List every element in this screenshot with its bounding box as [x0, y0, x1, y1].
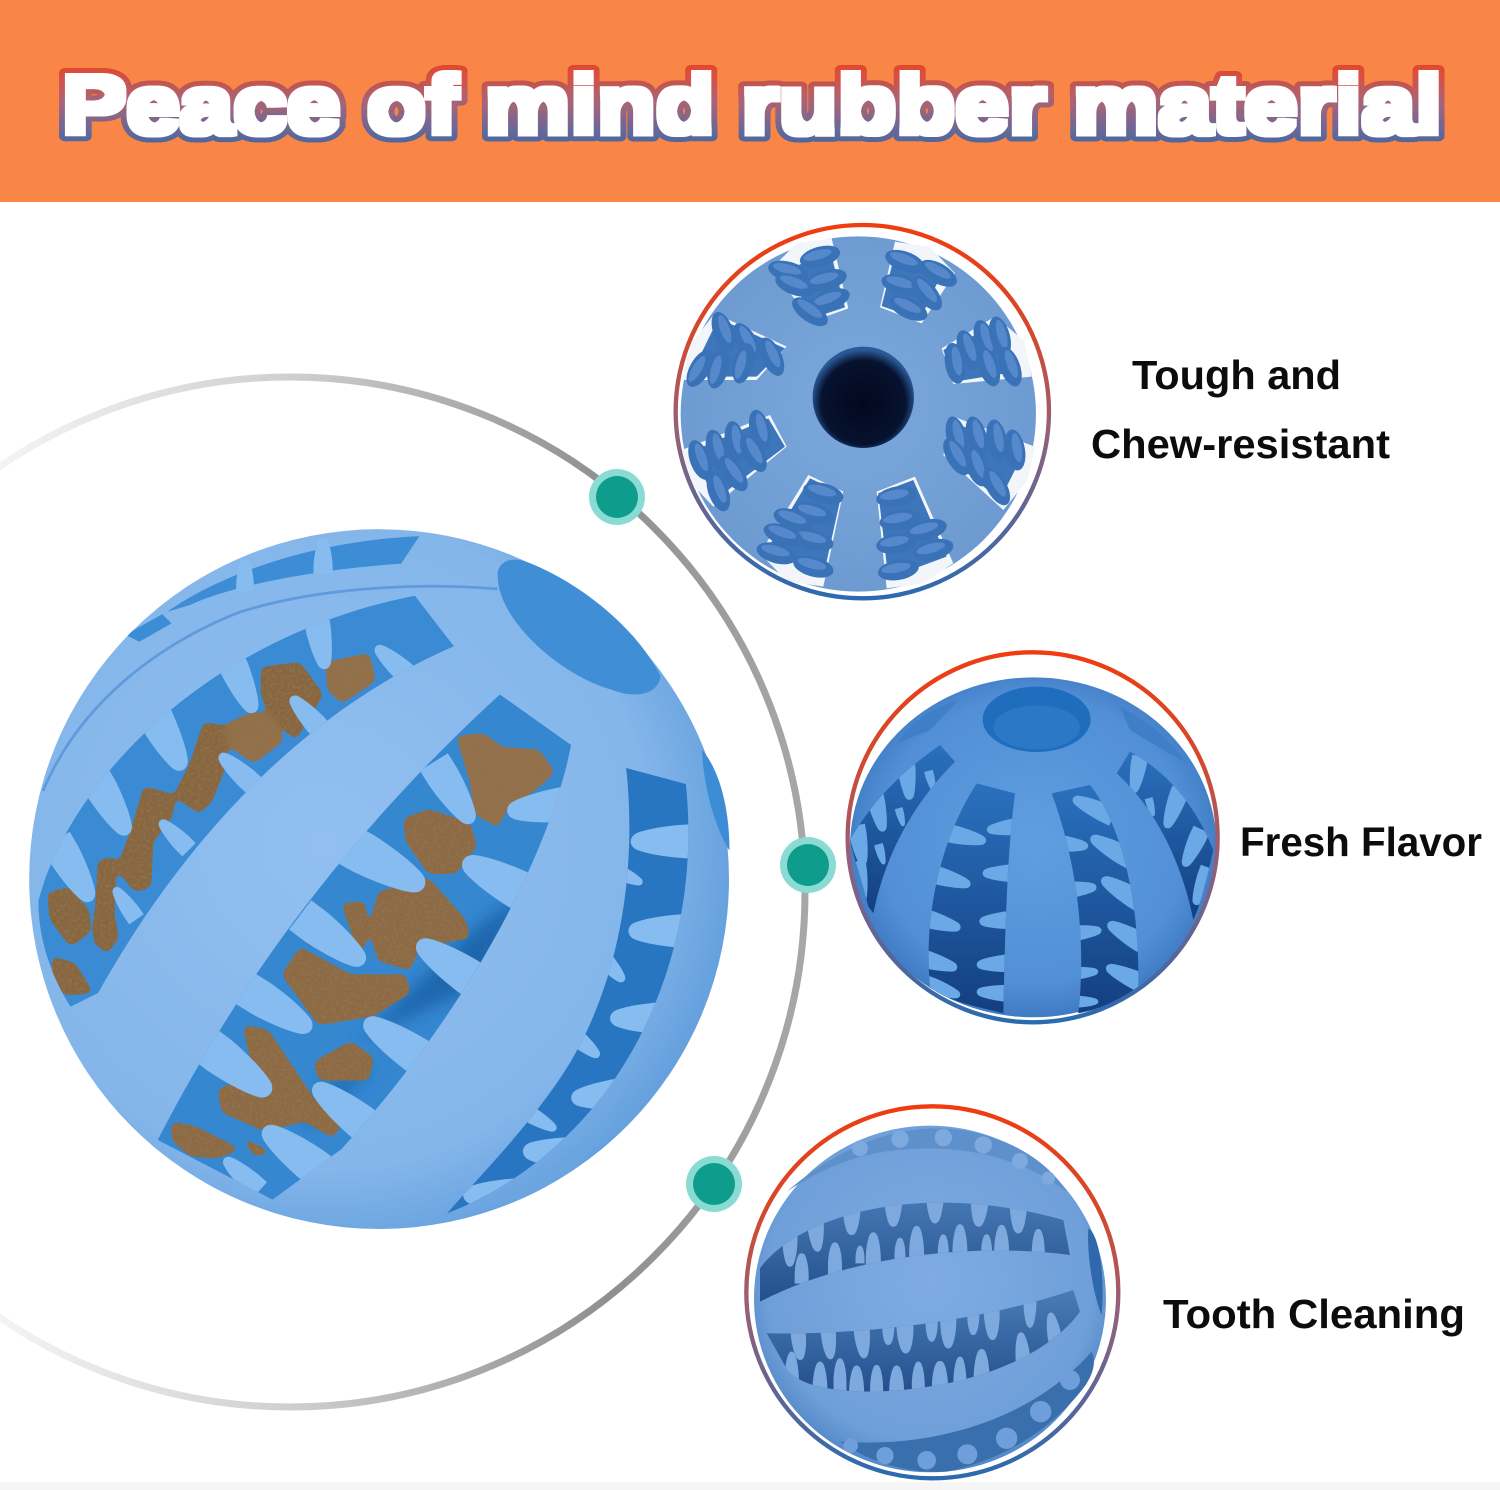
label: Tough and Chew-resistant: Chew-resistant [1091, 421, 1390, 467]
side hole [1088, 1228, 1103, 1315]
central slot with kibble [158, 694, 571, 1200]
label: Tooth Cleaning: Tooth Cleaning [1163, 1291, 1465, 1337]
main ball with kibble [20, 529, 732, 1229]
header band [0, 0, 1500, 202]
upper slot [760, 1202, 1070, 1302]
centre hole [813, 347, 914, 448]
ring [746, 1106, 1118, 1478]
detail ball 1 [676, 225, 1049, 598]
bottom strip with bumps [840, 1352, 1094, 1472]
label: Fresh Flavor: Fresh Flavor [1240, 819, 1482, 865]
node: top connector [589, 469, 645, 525]
connector arc [0, 377, 805, 1407]
right edge sliver [702, 750, 729, 851]
bottom strip [0, 1482, 1500, 1490]
slots [847, 700, 1217, 1017]
windows [682, 238, 1035, 588]
right slot with teeth [447, 768, 688, 1214]
node: middle connector [780, 837, 836, 893]
tooth clusters [690, 250, 1025, 578]
ring [676, 225, 1049, 598]
label: Tough and Chew-resistant: Tough and [1132, 352, 1341, 398]
detail ball 3 [746, 1106, 1118, 1478]
lower slot [766, 1290, 1080, 1392]
food hole [498, 560, 661, 694]
teeth [681, 242, 1028, 583]
detail ball 2 [847, 652, 1218, 1022]
upper slot with kibble [38, 596, 454, 1007]
top hole [983, 687, 1091, 752]
ring [848, 652, 1218, 1022]
title: Peace of mind rubber material [62, 60, 1442, 151]
top strip [787, 1128, 1067, 1192]
label: Tough and Chew-resistant [1091, 352, 1390, 467]
node: bottom connector [686, 1156, 742, 1212]
